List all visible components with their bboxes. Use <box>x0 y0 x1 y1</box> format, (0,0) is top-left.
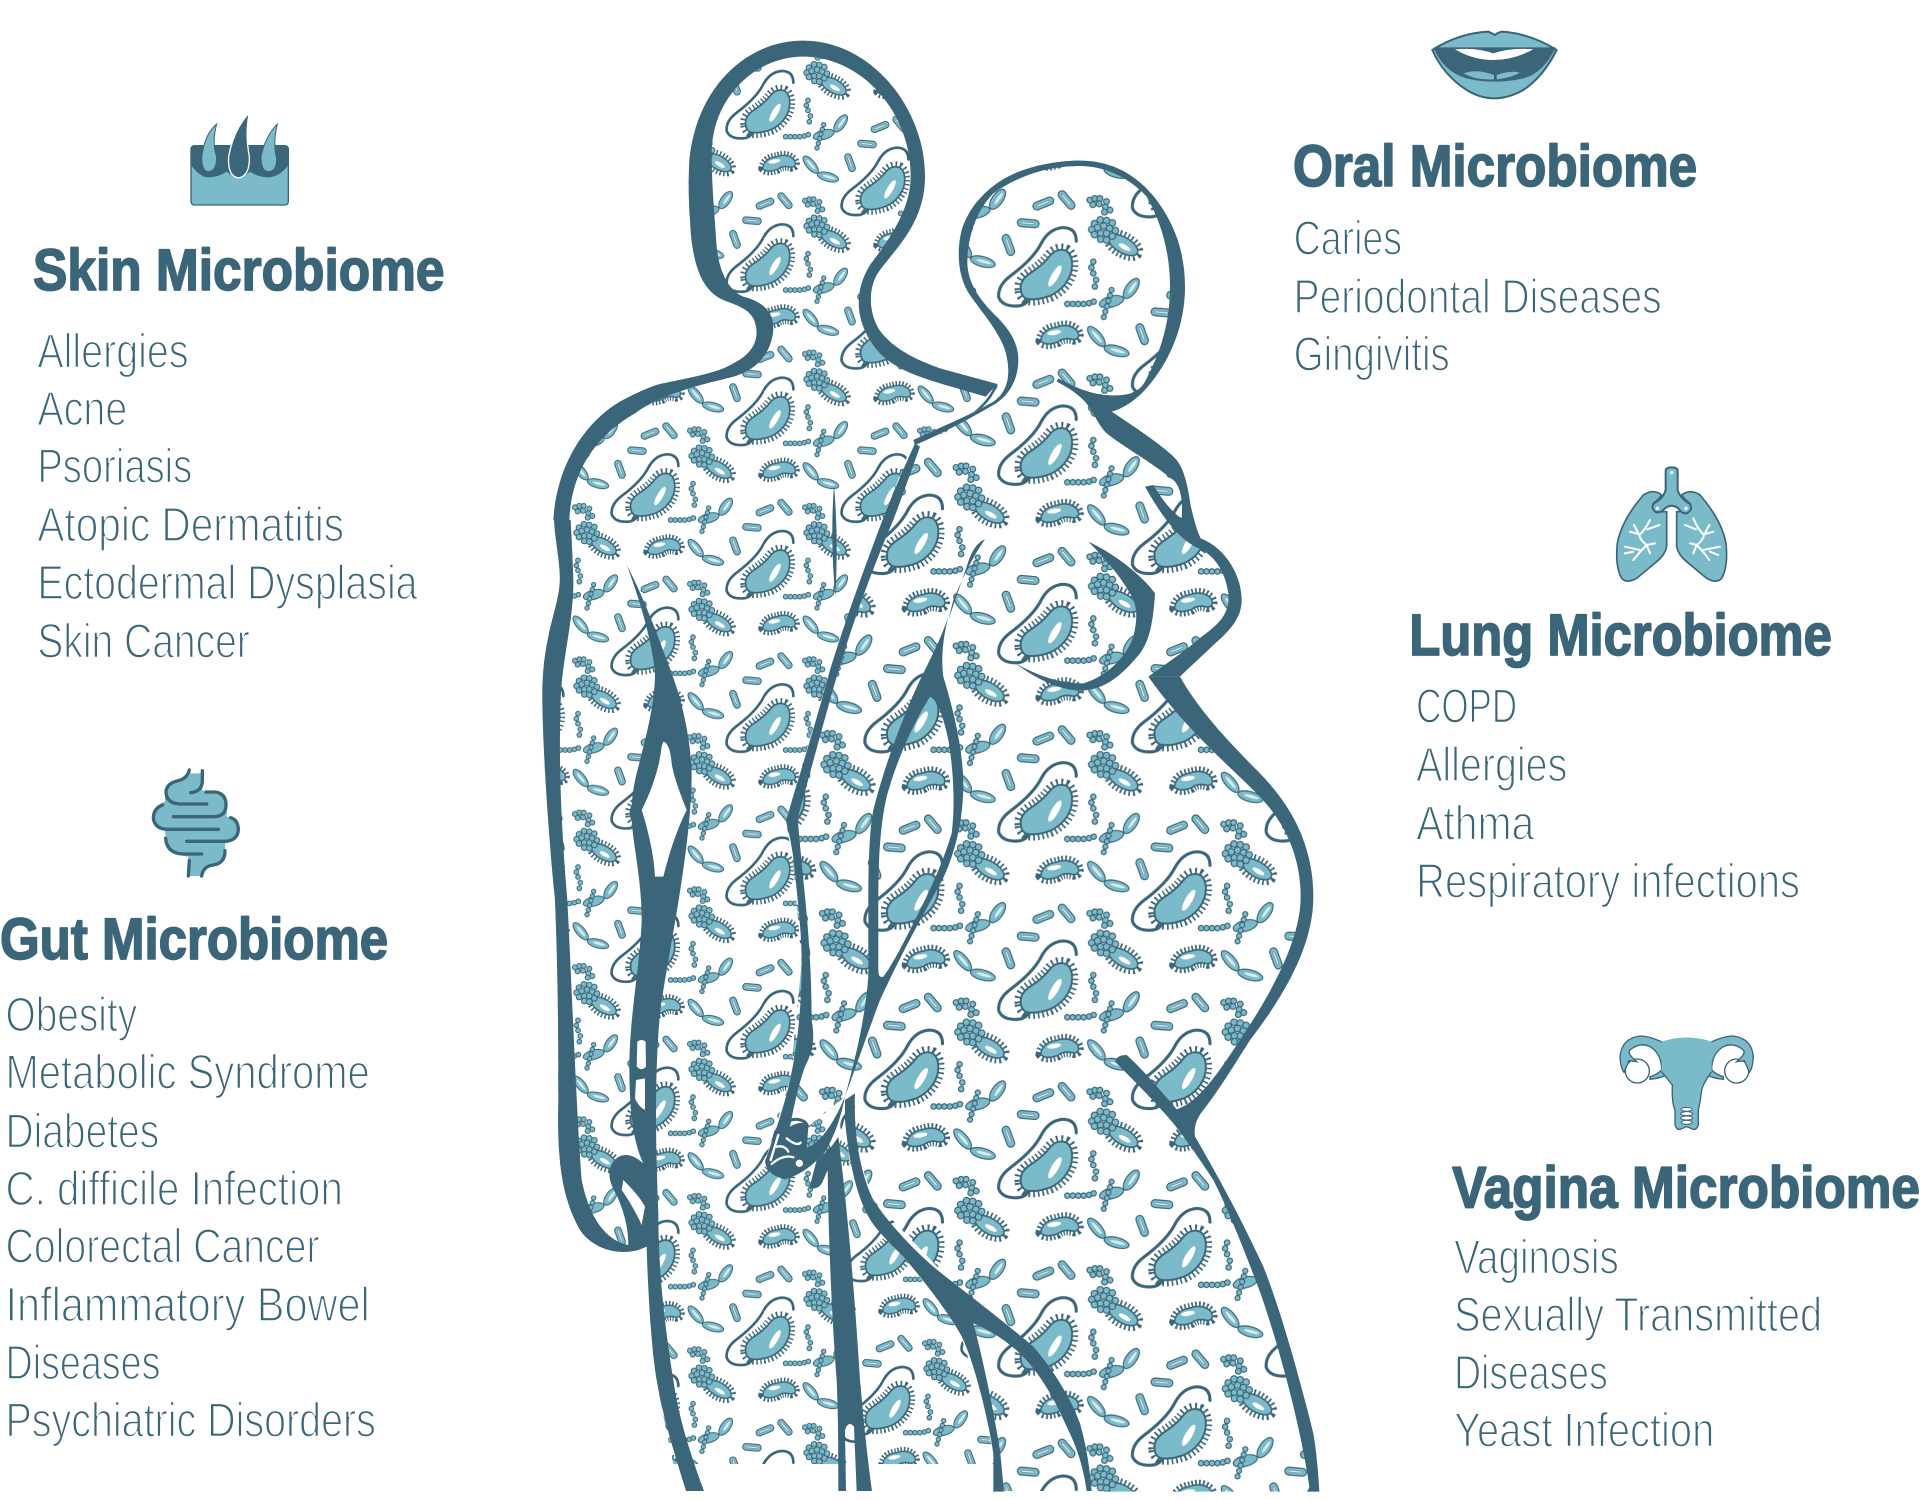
conditions list: Diabetes <box>6 1105 159 1158</box>
panel: vagina microbiome <box>1452 1036 1920 1458</box>
conditions list <box>1416 680 1800 909</box>
conditions list: Psychiatric Disorders <box>6 1394 376 1447</box>
conditions list: Skin Cancer <box>37 616 250 669</box>
woman back, arm, hip and rear leg outline <box>765 443 1092 1492</box>
conditions list: Periodontal Diseases <box>1294 271 1662 324</box>
icon: lips <box>1432 32 1557 98</box>
conditions list: Inflammatory Bowel <box>6 1279 370 1332</box>
man body microbe pattern <box>542 42 998 1464</box>
conditions list: Respiratory infections <box>1416 856 1800 909</box>
conditions list: Allergies <box>1416 739 1567 792</box>
conditions list: Vaginosis <box>1454 1231 1619 1284</box>
man arm, torso and leg outline <box>542 485 837 1491</box>
conditions list <box>6 989 376 1447</box>
icon: intestine <box>153 770 238 876</box>
heading: Lung Microbiome <box>1409 603 1832 668</box>
conditions list: Diseases <box>1454 1347 1608 1400</box>
conditions list <box>1294 213 1662 381</box>
icon: uterus <box>1620 1036 1753 1129</box>
conditions list: Acne <box>37 383 127 436</box>
conditions list: Sexually Transmitted <box>1454 1289 1822 1342</box>
conditions list: Allergies <box>37 325 189 378</box>
heading: Skin Microbiome <box>33 238 444 303</box>
conditions list: Diseases <box>6 1337 160 1390</box>
conditions list <box>37 325 418 669</box>
woman under-breast curve <box>1015 542 1155 691</box>
man head and shoulders outline <box>553 41 997 520</box>
panel: oral microbiome <box>1293 32 1697 381</box>
icon: skin with hair follicles <box>191 113 288 205</box>
conditions list: Gingivitis <box>1294 328 1450 381</box>
woman head, shoulder and breast outline <box>913 161 1242 677</box>
icon: lungs <box>1617 467 1727 581</box>
conditions list: Caries <box>1294 213 1402 266</box>
conditions list: Metabolic Syndrome <box>6 1047 370 1100</box>
conditions list: COPD <box>1416 680 1517 733</box>
woman body microbe pattern <box>766 160 1319 1492</box>
conditions list <box>1454 1231 1822 1458</box>
panel: lung microbiome <box>1409 467 1832 909</box>
woman rear leg microbe pattern <box>839 1124 994 1464</box>
conditions list: Yeast Infection <box>1454 1405 1714 1458</box>
conditions list: C. difficile Infection <box>6 1163 343 1216</box>
woman belly and front leg outline <box>1115 677 1319 1492</box>
panel: skin microbiome <box>33 113 444 669</box>
figure: man and pregnant woman filled with microbes <box>542 40 1320 1492</box>
conditions list: Atopic Dermatitis <box>37 499 344 552</box>
conditions list: Psoriasis <box>37 440 192 493</box>
conditions list: Ectodermal Dysplasia <box>37 557 418 610</box>
conditions list: Obesity <box>6 989 137 1042</box>
panel: gut microbiome <box>0 770 388 1447</box>
conditions list: Athma <box>1416 797 1535 850</box>
conditions list: Colorectal Cancer <box>6 1220 320 1273</box>
heading: Gut Microbiome <box>0 907 388 972</box>
heading: Oral Microbiome <box>1293 134 1697 199</box>
